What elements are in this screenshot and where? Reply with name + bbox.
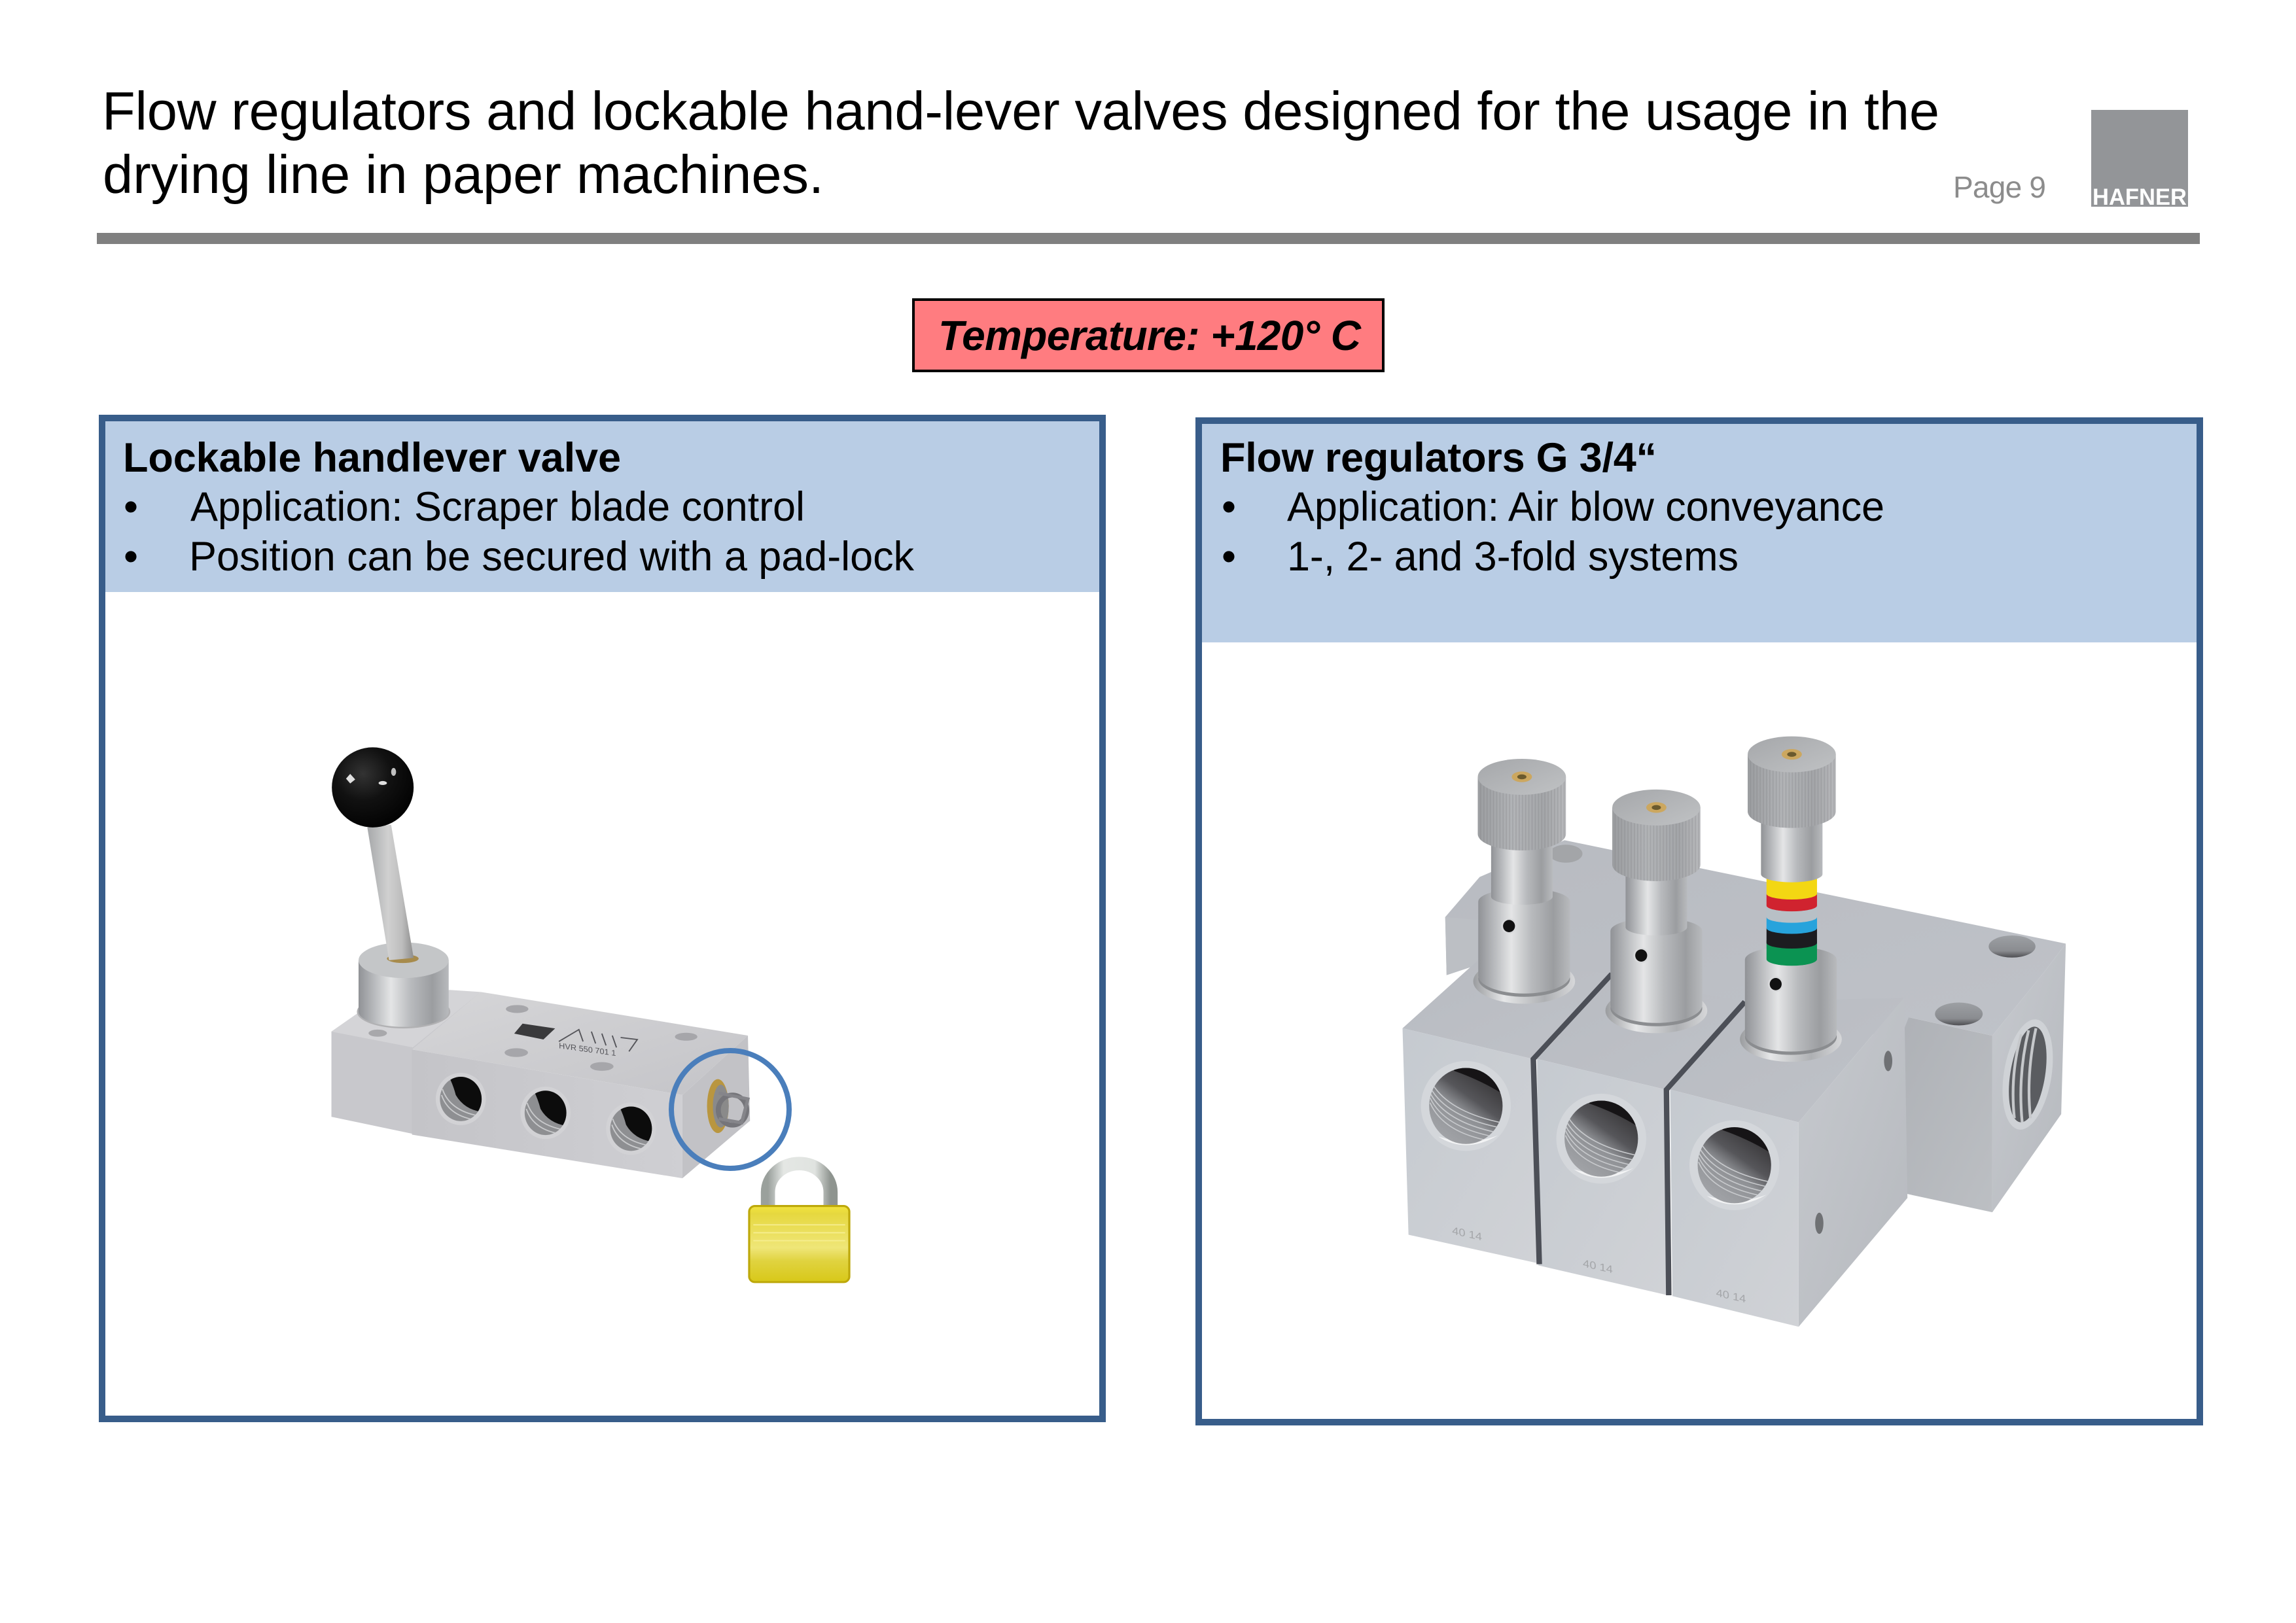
- panel header: handlever valve text: Lockable handlever valve: [123, 435, 621, 481]
- back manifold: [1445, 840, 2066, 1212]
- panel header: handlever valve text: •: [124, 534, 138, 580]
- block 1: [1402, 961, 1613, 1263]
- page number: Page 9: [1953, 170, 2046, 204]
- regulator 3 with colour rings: [1740, 737, 1842, 1062]
- colour rings: [1767, 875, 1817, 966]
- panel header: handlever valve text: •: [124, 484, 138, 530]
- cylinder: [357, 943, 450, 1028]
- regulator 2: [1606, 790, 1707, 1033]
- title: drying line in paper machines.: [103, 144, 824, 205]
- panel header: flow regulators text: 1-, 2- and 3-fold systems: [1287, 534, 1739, 580]
- title: [102, 80, 1939, 205]
- locking pin and washer: [707, 1079, 748, 1133]
- lever black ball: [332, 747, 414, 828]
- panel: flow regulators: [1199, 421, 2200, 1422]
- panel header: flow regulators text: •: [1222, 484, 1236, 530]
- product image: flow regulators: [1402, 737, 2066, 1327]
- valve main body: [412, 992, 750, 1178]
- logo: HAFNER: [2091, 110, 2188, 210]
- temperature callout: Temperature: +120° C: [938, 312, 1362, 359]
- panel header: flow regulators text: Flow regulators G 3/4“: [1220, 435, 1657, 481]
- panel header: handlever valve text: [102, 418, 1103, 592]
- valve main body: HVR 550 701 1: [559, 1041, 616, 1058]
- panel header: handlever valve text: Application: Scraper blade control: [190, 484, 805, 530]
- highlight circle around locking pin: [671, 1051, 789, 1168]
- lever stem: [367, 825, 414, 960]
- padlock icon: [749, 1164, 849, 1282]
- product image: hand-lever valve: [332, 747, 750, 1178]
- regulator 1: [1474, 759, 1575, 1003]
- panel header: flow regulators text: •: [1222, 534, 1236, 580]
- block 2: [1537, 977, 1746, 1295]
- title: Flow regulators and lockable hand-lever valves designed for the usage in the: [102, 80, 1939, 141]
- valve left end block: [332, 990, 483, 1134]
- temperature callout: [913, 300, 1383, 371]
- block 3: 40 14: [1716, 1286, 1746, 1305]
- panel header: flow regulators text: [1199, 421, 2200, 642]
- block gaps: [1533, 974, 1745, 1295]
- panel header: handlever valve text: Position can be secured with a pad-lock: [189, 534, 915, 580]
- block 1: 40 14: [1452, 1224, 1482, 1243]
- block 3: [1670, 998, 1907, 1327]
- panel header: flow regulators text: Application: Air blow conveyance: [1287, 484, 1884, 530]
- panel: lockable handlever valve: [102, 418, 1103, 1419]
- block 2: 40 14: [1583, 1257, 1613, 1276]
- logo: HAFNER: HAFNER: [2093, 184, 2187, 210]
